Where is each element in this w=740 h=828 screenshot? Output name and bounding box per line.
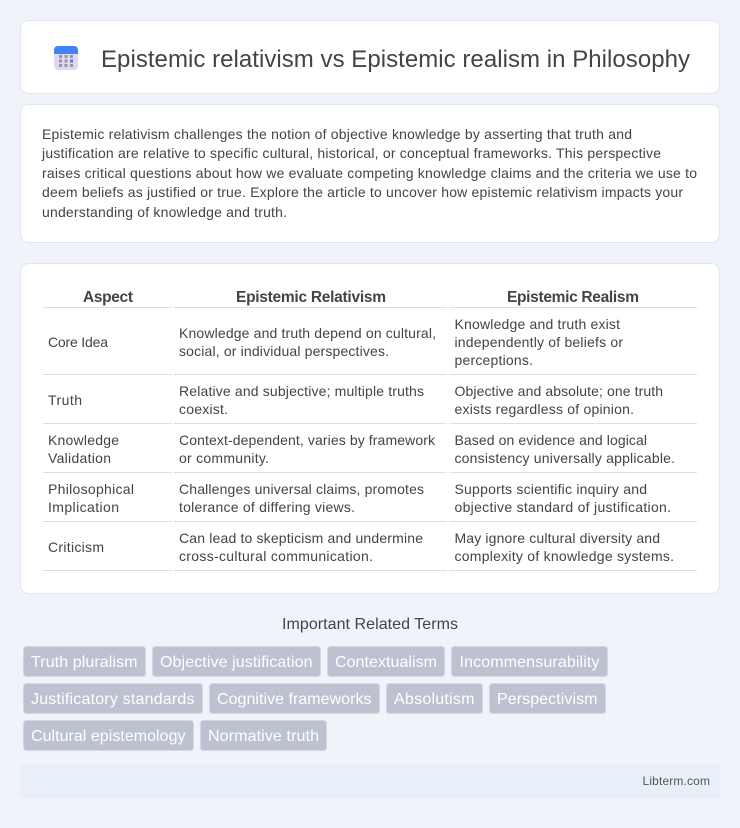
footer bar <box>20 764 720 798</box>
tag: cognitive frameworks: Cognitive frameworks <box>217 691 372 708</box>
row: knowledge validation: Validation <box>48 450 111 466</box>
title: Epistemic relativism vs Epistemic realism in Philosophy <box>101 46 690 73</box>
table header row: Epistemic Realism <box>507 289 639 306</box>
tag: incommensurability <box>452 646 608 676</box>
row: knowledge validation <box>43 432 697 473</box>
footer credit: Libterm.com <box>642 774 710 788</box>
row: criticism: Can lead to skepticism and undermine <box>179 530 423 546</box>
related terms tags <box>24 646 608 750</box>
table header row: Epistemic Relativism <box>236 289 386 306</box>
icon: calendar <box>54 46 78 70</box>
row: truth <box>43 383 697 424</box>
tag: cultural epistemology <box>24 720 194 750</box>
row: philosophical implication: Philosophical <box>48 481 134 497</box>
tag: normative truth <box>200 720 326 750</box>
intro text <box>41 126 697 220</box>
tag: cultural epistemology: Cultural epistemology <box>31 728 186 745</box>
row: knowledge validation: Knowledge <box>48 432 119 448</box>
row: truth: Relative and subjective; multiple truths <box>179 383 424 399</box>
row: core idea: Core Idea <box>48 334 108 350</box>
tag: absolutism <box>386 684 482 714</box>
tag: contextualism <box>328 646 444 676</box>
comparison table panel <box>20 264 720 594</box>
row: truth: Truth <box>48 392 82 408</box>
row: criticism: cross-cultural communication. <box>179 548 373 564</box>
tag: justificatory standards: Justificatory standards <box>31 691 194 708</box>
row: criticism: May ignore cultural diversity and <box>454 530 660 546</box>
row: truth: exists regardless of opinion. <box>454 401 634 417</box>
row: philosophical implication: Supports scientific inquiry and <box>454 481 647 497</box>
intro text: understanding of knowledge and truth. <box>42 204 287 220</box>
row: philosophical implication: objective standard of justification. <box>454 499 671 515</box>
intro text: Epistemic relativism challenges the notion of objective knowledge by asserting that truth and <box>42 126 632 142</box>
intro text: justification are relative to specific cultural, historical, or conceptual frameworks. This perspective <box>41 145 661 161</box>
row: criticism: complexity of knowledge systems. <box>454 548 674 564</box>
tag: objective justification <box>152 646 320 676</box>
row: knowledge validation: Based on evidence and logical <box>454 432 647 448</box>
tag: absolutism: Absolutism <box>394 691 474 708</box>
row: criticism <box>43 530 697 571</box>
row: philosophical implication: tolerance of differing views. <box>179 499 355 515</box>
row: philosophical implication <box>43 481 697 522</box>
row: knowledge validation: Context-dependent, varies by framework <box>179 432 436 448</box>
row: criticism: Criticism <box>48 539 104 555</box>
row: truth: coexist. <box>179 401 228 417</box>
tag: justificatory standards <box>24 684 202 714</box>
row: truth: Objective and absolute; one truth <box>454 383 663 399</box>
related terms heading: Important Related Terms <box>282 616 458 633</box>
tag: truth pluralism <box>24 646 146 676</box>
table header row <box>43 289 697 308</box>
intro text: raises critical questions about how we evaluate competing knowledge claims and the criteria we use to <box>42 165 697 181</box>
tag: incommensurability: Incommensurability <box>460 654 600 671</box>
row: core idea <box>43 316 697 375</box>
tag: perspectivism <box>490 684 606 714</box>
tag: truth pluralism: Truth pluralism <box>31 654 138 671</box>
intro panel <box>20 104 720 242</box>
row: core idea: perceptions. <box>454 352 533 368</box>
tag: contextualism: Contextualism <box>335 654 437 671</box>
row: philosophical implication: Implication <box>48 499 119 515</box>
row: core idea: Knowledge and truth depend on cultural, <box>179 325 436 341</box>
row: core idea: independently of beliefs or <box>454 334 623 350</box>
tag: cognitive frameworks <box>210 684 380 714</box>
row: core idea: Knowledge and truth exist <box>454 316 620 332</box>
table header row: Aspect <box>83 289 133 306</box>
tag: normative truth: Normative truth <box>208 728 319 745</box>
row: core idea: social, or individual perspectives. <box>179 343 389 359</box>
intro text: deem beliefs as justified or true. Explore the article to uncover how epistemic relativism impacts your <box>42 184 683 200</box>
tag: objective justification: Objective justification <box>160 654 312 671</box>
tag: perspectivism: Perspectivism <box>497 691 598 708</box>
row: knowledge validation: consistency universally applicable. <box>454 450 675 466</box>
header panel <box>20 20 720 94</box>
row: knowledge validation: or community. <box>179 450 269 466</box>
row: philosophical implication: Challenges universal claims, promotes <box>179 481 424 497</box>
